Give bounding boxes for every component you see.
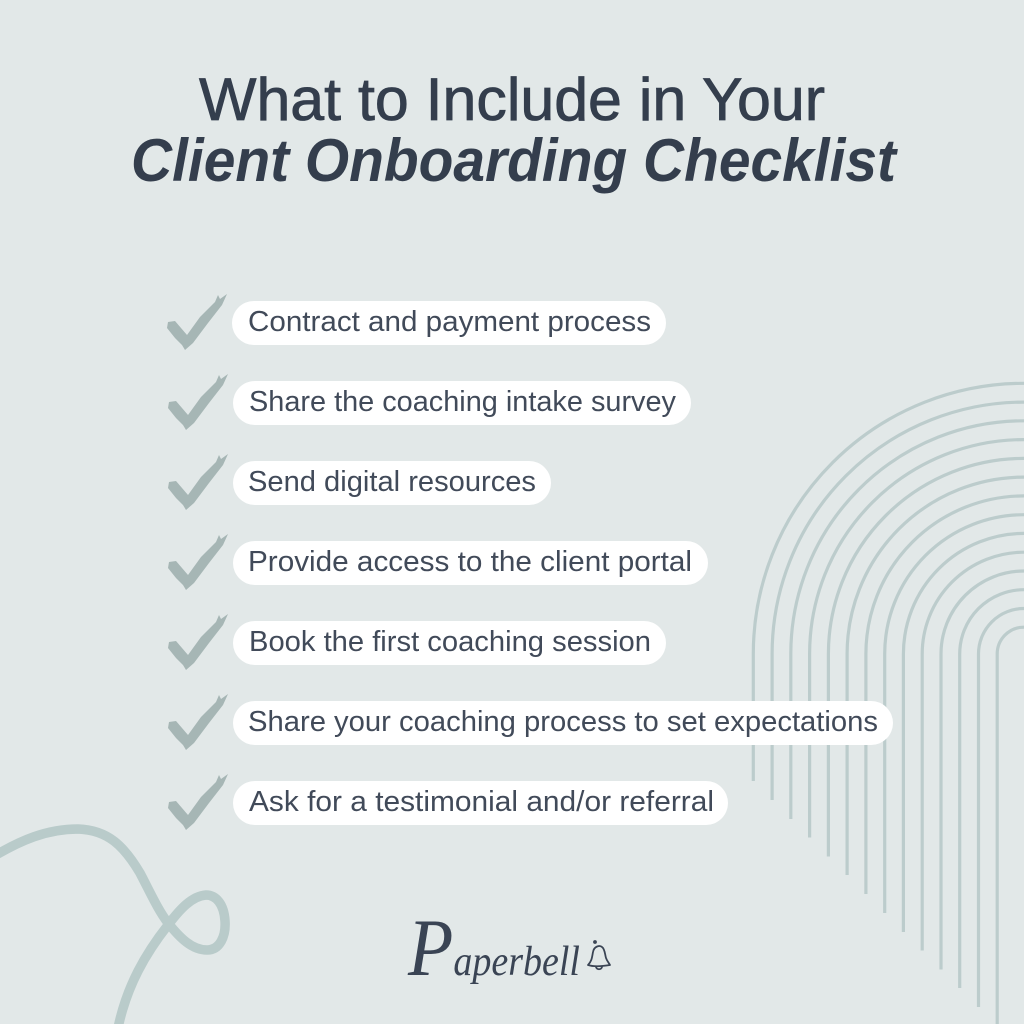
title bbox=[131, 66, 899, 194]
item 3: Send digital resources bbox=[248, 466, 536, 498]
item 1 bbox=[167, 294, 666, 350]
checklist bbox=[167, 294, 893, 830]
item 2 bbox=[168, 374, 691, 430]
item 6 bbox=[168, 694, 893, 750]
item 7: Ask for a testimonial and/or referral bbox=[249, 786, 714, 818]
item 6: Share your coaching process to set expectations bbox=[248, 706, 878, 738]
decorative concentric arches bbox=[753, 383, 1024, 1024]
item 4: Provide access to the client portal bbox=[248, 546, 692, 578]
logo wordmark: Paperbell bbox=[407, 902, 580, 993]
item 2: Share the coaching intake survey bbox=[249, 386, 676, 418]
item 1: Contract and payment process bbox=[248, 306, 651, 338]
title line 2: Client Onboarding Checklist bbox=[131, 127, 899, 194]
item 7 bbox=[168, 774, 728, 830]
item 5: Book the first coaching session bbox=[249, 626, 651, 658]
item 3 bbox=[168, 454, 551, 510]
item 5 bbox=[168, 614, 666, 670]
title line 1: What to Include in Your bbox=[199, 66, 825, 133]
decorative looping line bbox=[0, 829, 225, 1024]
icon: bell bbox=[588, 941, 610, 969]
item 4 bbox=[168, 534, 708, 590]
logo: Paperbell bbox=[407, 902, 610, 993]
